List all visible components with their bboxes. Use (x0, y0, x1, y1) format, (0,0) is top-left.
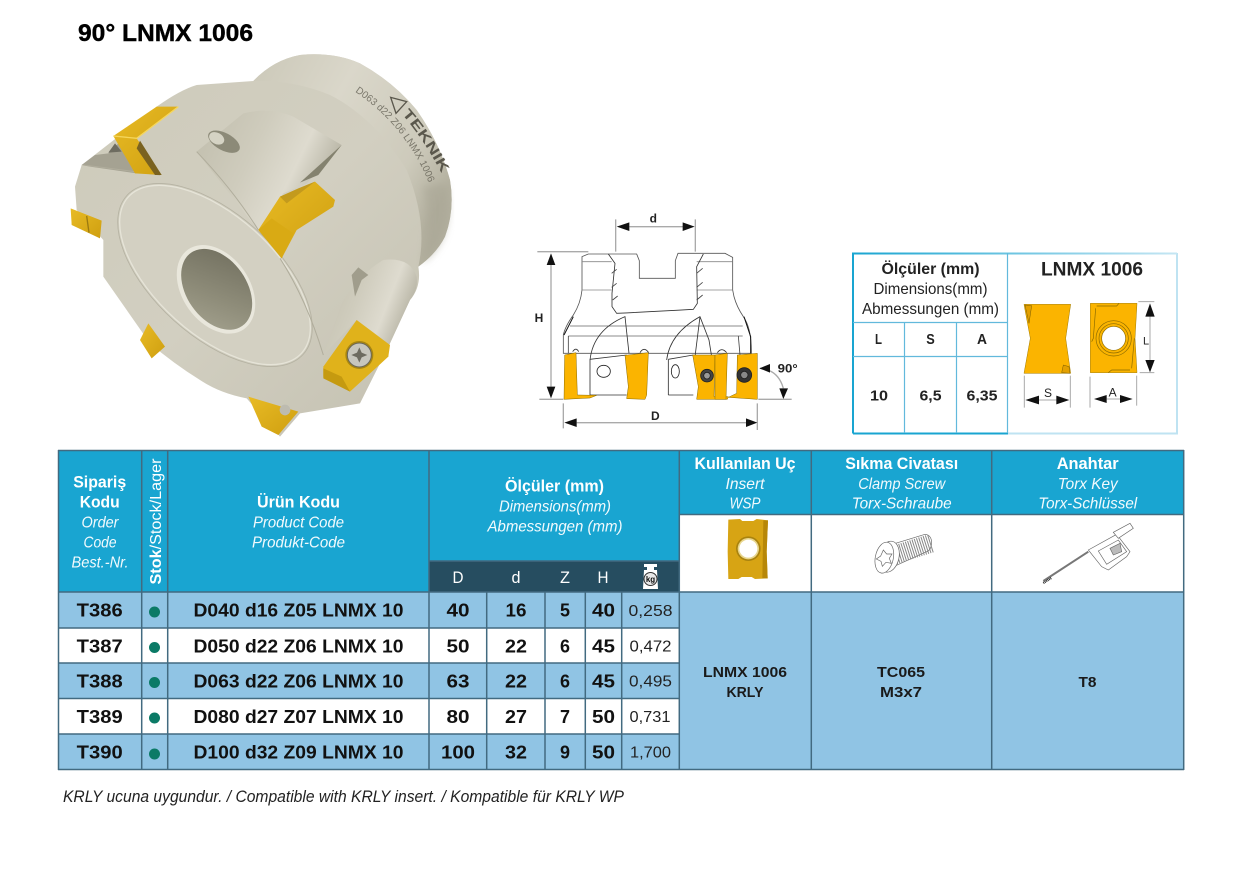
row: T390: D100 d32 Z09 LNMX 10 (194, 742, 404, 762)
label H: H (535, 311, 543, 325)
insert 3 (693, 355, 728, 399)
cutter outline (563, 253, 751, 353)
row: T389: 0,731 (630, 709, 671, 726)
header: order code: Order (82, 515, 119, 532)
footnote: KRLY ucuna uygundur. / Compatible with KRLY insert. / Kompatible für KRLY WP (63, 788, 624, 806)
dimension lines (537, 219, 792, 430)
row: T387: 50 (446, 636, 470, 656)
header: order code: Kodu (80, 493, 120, 512)
header: order code: Sipariş (73, 473, 126, 492)
icon: torx key (1043, 523, 1133, 583)
panel heading (862, 259, 999, 318)
header: clamp screw: Torx-Schraube (852, 496, 952, 512)
row: T387: T387 (77, 636, 123, 656)
flute 1 (197, 111, 342, 230)
header: torx key: Torx Key (1058, 476, 1119, 493)
marking: logo triangle (391, 97, 407, 113)
label d: d (650, 212, 657, 226)
row: T389: 50 (592, 707, 615, 727)
label 90°: 90° (778, 362, 798, 376)
header: dimension symbols: d (512, 568, 520, 587)
dimension labels: S (1044, 386, 1052, 400)
header: dimension symbols: Z (560, 568, 570, 587)
accessory image cells (679, 514, 1184, 592)
header: insert: Insert (726, 476, 765, 493)
flute 3 (82, 143, 137, 173)
header: product code: Product Code (253, 515, 344, 532)
table rows (58, 592, 1184, 770)
values: 10 (870, 388, 888, 404)
header: dimensions: Dimensions(mm) (499, 499, 611, 516)
row: T389: 80 (446, 707, 470, 727)
merged cell: screw code (877, 664, 925, 701)
row: T388: 22 (505, 672, 527, 692)
row: T389: D080 d27 Z07 LNMX 10 (194, 707, 404, 727)
insert: middle (258, 182, 335, 258)
label D: D (651, 409, 660, 423)
row: T390: 9 (560, 742, 570, 762)
row: T387 (77, 636, 672, 656)
header: order code (72, 473, 128, 572)
merged cell: screw code: TC065 (877, 664, 925, 681)
row: T387: 0,472 (630, 638, 672, 656)
insert drawings: A (1109, 385, 1117, 399)
row: T389: 7 (560, 707, 570, 727)
cutter body silhouette (75, 54, 452, 437)
row: T387: D050 d22 Z06 LNMX 10 (194, 636, 404, 656)
row: T388: 63 (446, 672, 470, 692)
header: dimension symbols: D (452, 568, 464, 587)
product photo: milling cutter (70, 54, 452, 436)
header: dimension symbols: H (598, 568, 608, 587)
panel heading: Dimensions(mm) (874, 281, 988, 298)
row: T388: 0,495 (629, 674, 672, 690)
row: T386 (77, 601, 673, 621)
grid lines (58, 450, 1184, 770)
insert 2 (625, 353, 648, 399)
header: insert: WSP (730, 496, 761, 512)
insert drawings (1024, 302, 1155, 408)
panel border (854, 253, 1177, 433)
header: stock: Stok/Stock/Lager (148, 458, 165, 584)
panel heading: Abmessungen (mm) (862, 301, 999, 318)
row: T386: D040 d16 Z05 LNMX 10 (194, 601, 404, 621)
icon: clamp screw (872, 534, 932, 575)
row: T390: 100 (441, 742, 475, 762)
insert 1 (564, 353, 597, 399)
column labels: L (875, 331, 882, 348)
row: T388: 45 (592, 672, 615, 692)
row: T388 (77, 672, 672, 692)
header: product code: Ürün Kodu (257, 493, 340, 512)
header: torx key: Torx-Schlüssel (1038, 496, 1138, 512)
row: T389 (77, 707, 671, 727)
gold inserts (564, 353, 757, 399)
merged cell: insert code: KRLY (726, 684, 764, 701)
header: clamp screw (845, 454, 958, 512)
column labels: S (926, 331, 935, 348)
header: dimensions (487, 477, 622, 536)
dimension lines (1024, 302, 1154, 408)
dimension labels (535, 212, 798, 423)
dimension arrows (547, 222, 788, 427)
insert: left (71, 208, 102, 238)
merged cell: screw code: M3x7 (880, 684, 922, 701)
header: dimension symbols (452, 568, 608, 587)
header: clamp screw: Sıkma Civatası (845, 454, 958, 473)
header: insert: Kullanılan Uç (694, 454, 796, 473)
row: T386: T386 (77, 601, 123, 621)
header: order code: Code (84, 535, 117, 552)
insert top view (1090, 303, 1137, 373)
insert drawings: L (1143, 335, 1149, 347)
merged cell: key code: T8 (1078, 674, 1096, 691)
front face (89, 153, 341, 397)
insert: lower left (140, 323, 165, 358)
row: T386: 5 (560, 601, 570, 621)
insert name: LNMX 1006 (1041, 260, 1143, 280)
insert side view (1024, 304, 1071, 373)
insert 4 (715, 353, 727, 399)
insert: bottom with screw (248, 397, 298, 435)
flank edge (83, 152, 323, 355)
header: order code: Best.-Nr. (72, 555, 128, 572)
screw access hole (205, 126, 243, 157)
shank (253, 54, 452, 267)
header: torx key (1038, 454, 1138, 512)
values: 6,35 (966, 388, 998, 404)
column labels: A (977, 331, 987, 348)
header: clamp screw: Clamp Screw (858, 476, 947, 493)
row: T387: 6 (560, 636, 570, 656)
row: T389: 27 (505, 707, 527, 727)
marking: brand: TEKNIK (404, 108, 450, 173)
row: T390 (77, 742, 671, 762)
row: T389: T389 (77, 707, 123, 727)
technical drawing: cutter side view (535, 212, 798, 430)
title: 90° LNMX 1006 (78, 20, 253, 47)
merged cell: insert code: LNMX 1006 (703, 664, 787, 681)
insert dimensions panel (853, 253, 1177, 434)
lower body flutes (590, 317, 712, 360)
row: T386: 40 (592, 601, 615, 621)
row: T390: T390 (77, 742, 123, 762)
dimension arrows (1025, 303, 1155, 404)
header: insert (694, 454, 796, 512)
row: T388: T388 (77, 672, 123, 692)
merged cell: insert code (703, 664, 787, 701)
panel heading: Ölçüler (mm) (882, 259, 980, 278)
row: T387: 22 (505, 636, 527, 656)
header: torx key: Anahtar (1057, 454, 1119, 473)
row: T388: D063 d22 Z06 LNMX 10 (194, 672, 404, 692)
header background (58, 450, 1184, 592)
row: T386: 0,258 (628, 603, 673, 620)
row: T388: 6 (560, 672, 570, 692)
centre bore (161, 230, 271, 349)
row: T390: 1,700 (630, 744, 671, 762)
header: dimensions: Ölçüler (mm) (505, 477, 604, 496)
holes (597, 365, 610, 377)
row: T386: 16 (506, 601, 526, 621)
icon: weight: kg (646, 575, 655, 584)
insert 5 (728, 353, 757, 399)
values: 6,5 (920, 388, 942, 404)
values (870, 388, 998, 404)
header: dimensions: Abmessungen (mm) (487, 519, 622, 536)
flute 2 (323, 260, 417, 355)
marking: D063 d22 Z06 LNMX 1006: D063 d22 Z06 LNMX 1006 (356, 86, 434, 182)
row: T390: 50 (592, 742, 615, 762)
row: T390: 32 (505, 742, 527, 762)
product table (58, 450, 1184, 770)
header: product code: Produkt-Code (252, 535, 345, 552)
icon: insert (728, 519, 768, 579)
insert: right with clamp screw (323, 320, 390, 392)
header: product code (252, 493, 345, 552)
icon: weight (643, 564, 658, 589)
row: T387: 45 (592, 636, 615, 656)
column labels (875, 331, 987, 348)
insert: top (113, 107, 178, 175)
clamp screws (701, 369, 713, 382)
dimensions subheader band (429, 561, 679, 592)
row: T386: 40 (446, 601, 470, 621)
engraved marking (356, 86, 450, 182)
